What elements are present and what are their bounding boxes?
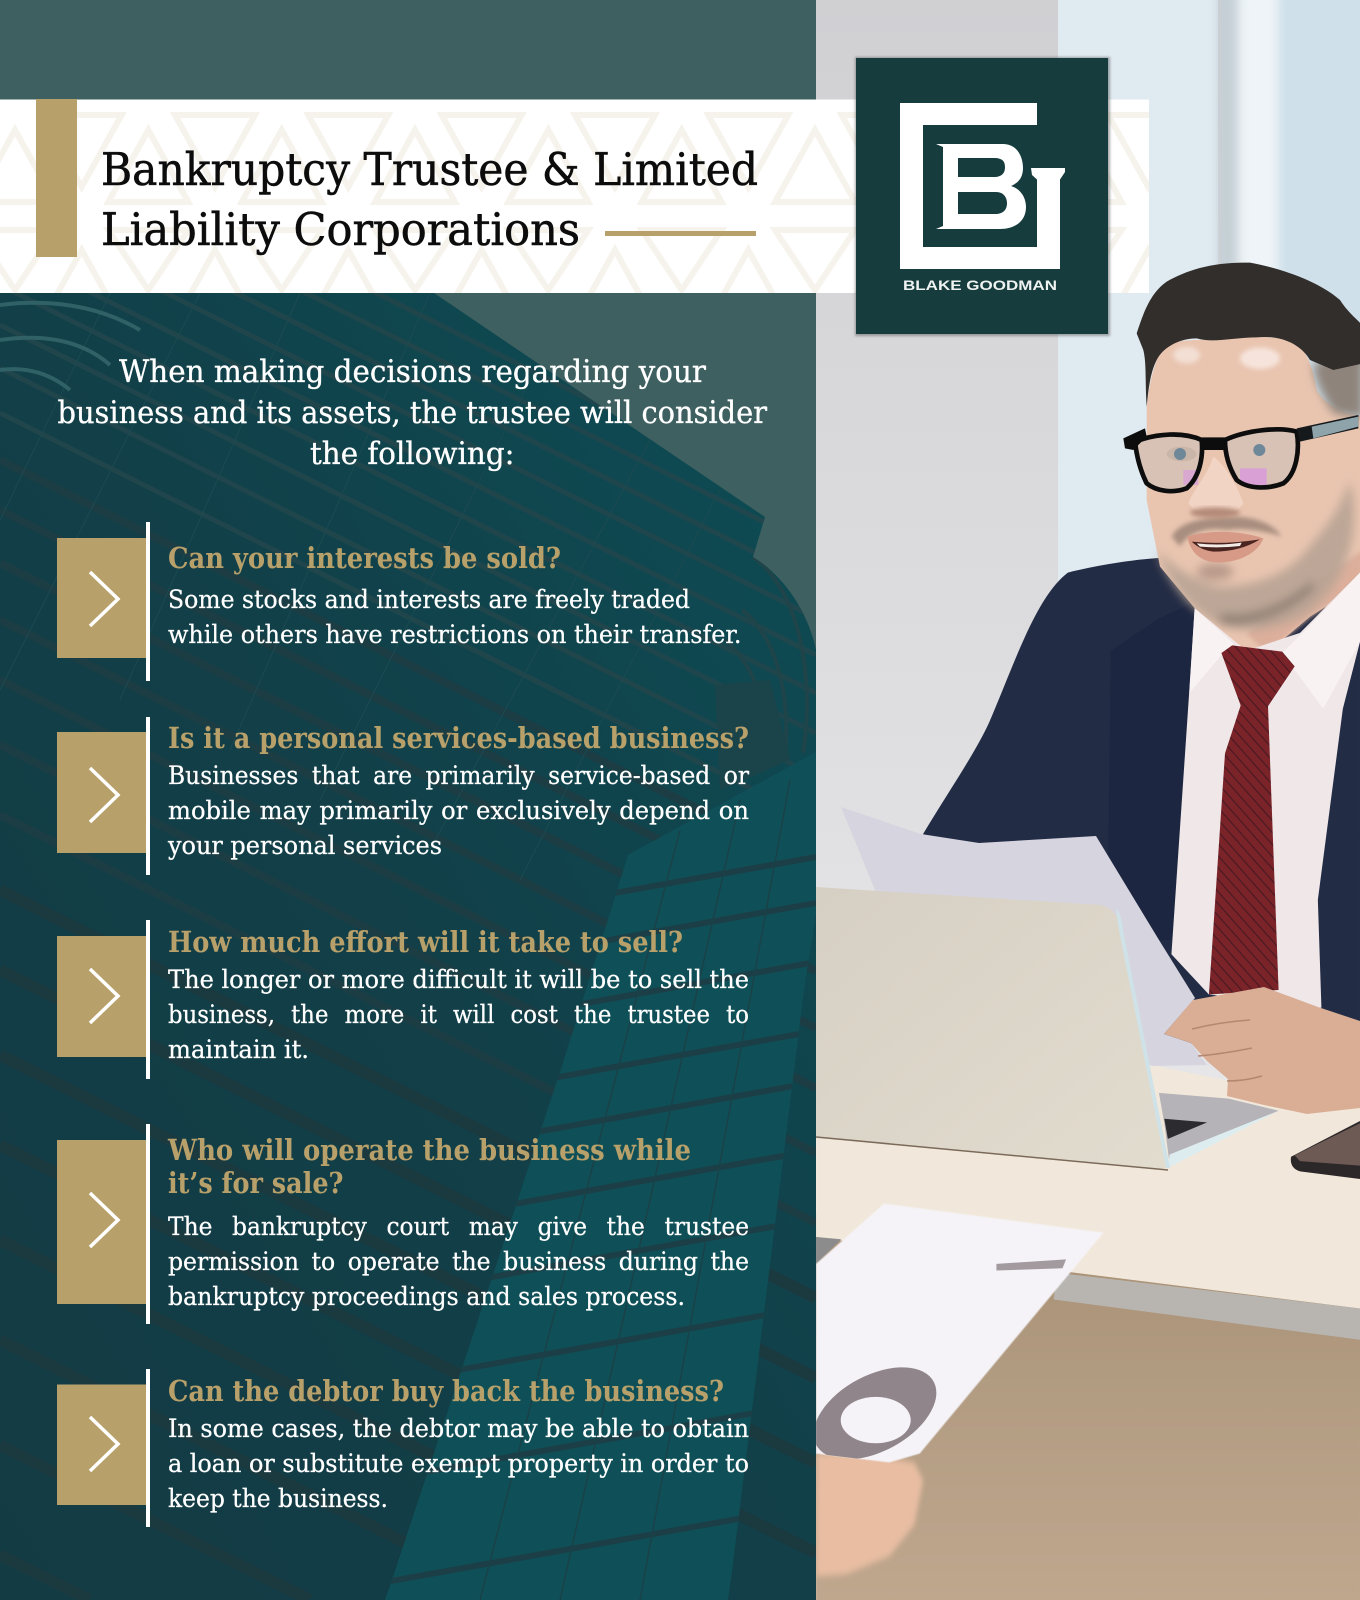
divider bar bbox=[146, 522, 150, 681]
body text: while others have restrictions on their transfer. bbox=[168, 620, 742, 650]
body text: maintain it. bbox=[168, 1035, 309, 1065]
title bbox=[101, 143, 758, 256]
body text: The longer or more difficult it will be to sell the bbox=[168, 965, 749, 995]
body text bbox=[168, 585, 742, 650]
intro paragraph: the following: bbox=[310, 436, 514, 472]
photo background: wall and windows bbox=[800, 0, 1360, 1100]
shirt bbox=[1171, 573, 1360, 1008]
divider bar bbox=[146, 717, 150, 875]
body text: a loan or substitute exempt property in order to bbox=[168, 1449, 749, 1479]
body text bbox=[168, 965, 749, 1065]
body text bbox=[167, 761, 749, 861]
logo frame bbox=[900, 103, 1065, 269]
forehead highlights bbox=[1173, 347, 1360, 653]
body text: In some cases, the debtor may be able to obtain bbox=[168, 1414, 749, 1444]
heading: Can the debtor buy back the business? bbox=[168, 1374, 724, 1408]
glasses bbox=[1123, 415, 1358, 491]
title: Liability Corporations bbox=[101, 203, 580, 256]
heading: Who will operate the business while bbox=[167, 1133, 691, 1167]
body text: Businesses that are primarily service-based or bbox=[168, 761, 749, 791]
body text: The bankruptcy court may give the trustee bbox=[168, 1212, 749, 1242]
logo letter B bbox=[936, 144, 1026, 229]
icon: gold chevron box bbox=[57, 538, 146, 658]
table edge bbox=[816, 1237, 841, 1264]
under table bbox=[816, 1213, 1360, 1600]
title: Bankruptcy Trustee & Limited bbox=[101, 143, 758, 196]
body text: Some stocks and interests are freely traded bbox=[168, 585, 690, 615]
icon: gold chevron box bbox=[57, 936, 146, 1057]
item 2: personal services-based business bbox=[57, 717, 749, 875]
body text: bankruptcy proceedings and sales process. bbox=[168, 1282, 685, 1312]
nose bbox=[1188, 457, 1243, 518]
body text bbox=[168, 1414, 749, 1514]
heading: Can your interests be sold? bbox=[168, 541, 561, 575]
body text: permission to operate the business during the bbox=[168, 1247, 749, 1277]
item 3: effort to sell bbox=[57, 920, 749, 1079]
tie bbox=[1221, 645, 1295, 707]
heading bbox=[167, 1133, 691, 1200]
item 5: debtor buy back bbox=[57, 1369, 749, 1527]
hand bbox=[816, 1451, 923, 1576]
skin bbox=[1147, 337, 1360, 653]
man: jacket bbox=[923, 558, 1360, 1044]
divider bar bbox=[146, 1124, 150, 1324]
heading: How much effort will it take to sell? bbox=[168, 925, 683, 959]
intro paragraph: business and its assets, the trustee will consider bbox=[58, 395, 768, 431]
left panel background: building skyline bbox=[0, 0, 820, 1600]
divider bar bbox=[146, 920, 150, 1079]
document behind laptop bbox=[841, 807, 1207, 1066]
body text: keep the business. bbox=[168, 1484, 388, 1514]
logo: Blake Goodman bbox=[855, 57, 1110, 336]
icon: gold chevron box bbox=[57, 732, 146, 853]
glass tower bbox=[380, 750, 820, 1600]
mouth bbox=[1187, 532, 1263, 562]
man: head and face bbox=[1123, 263, 1360, 653]
body text: your personal services bbox=[167, 831, 442, 861]
moustache bbox=[1172, 517, 1282, 547]
man: shirt and tie bbox=[1171, 573, 1360, 1008]
item 1: can your interests be sold bbox=[57, 522, 742, 681]
banner white band with triangle pattern bbox=[0, 100, 1149, 293]
icon: gold chevron box bbox=[57, 1384, 146, 1505]
header banner bbox=[0, 99, 1149, 293]
laptop deck bbox=[1159, 1093, 1279, 1164]
building stripes bbox=[0, 293, 816, 1558]
photo: businessman at desk bbox=[800, 0, 1360, 1600]
icon: gold chevron box bbox=[57, 1140, 146, 1304]
document sheet bbox=[816, 1204, 1104, 1463]
hair bbox=[1137, 263, 1360, 418]
foreground document and hand bbox=[804, 1204, 1104, 1576]
item 4: who will operate the business bbox=[57, 1124, 749, 1324]
table top bbox=[816, 1066, 1360, 1308]
sky bbox=[0, 0, 816, 1600]
intro paragraph bbox=[58, 354, 768, 472]
body text bbox=[168, 1212, 749, 1312]
heading: Is it a personal services-based business? bbox=[168, 721, 749, 755]
divider bar bbox=[146, 1369, 150, 1527]
body text: mobile may primarily or exclusively depend on bbox=[168, 796, 749, 826]
laptop lid bbox=[816, 887, 1168, 1169]
hand holding document bbox=[1164, 987, 1360, 1114]
intro paragraph: When making decisions regarding your bbox=[119, 354, 707, 390]
phone bbox=[1291, 1121, 1360, 1179]
heading: it’s for sale? bbox=[168, 1166, 344, 1200]
gold accent bar bbox=[36, 99, 77, 257]
table and laptop deck bbox=[816, 1066, 1360, 1600]
title underline rule bbox=[605, 231, 756, 236]
body text: business, the more it will cost the trustee to bbox=[168, 1000, 749, 1030]
building bbox=[0, 293, 816, 1600]
logo wordmark: BLAKE GOODMAN bbox=[903, 277, 1057, 293]
document contents bbox=[816, 1259, 1066, 1459]
stubble bbox=[1157, 480, 1354, 630]
